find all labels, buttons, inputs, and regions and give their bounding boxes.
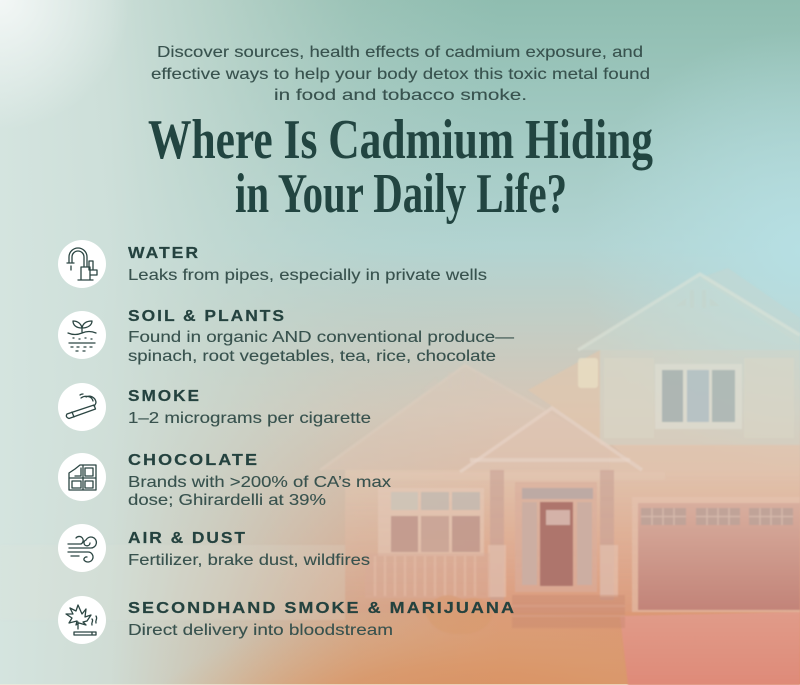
description: chocolate: Brands with >200% of CA’s max: [128, 474, 391, 491]
lower gable details: [422, 372, 510, 390]
lower left roof: [320, 365, 640, 470]
steps: [512, 595, 625, 628]
description: water: Leaks from pipes, especially in private wells: [128, 267, 487, 284]
upper rear roof: [700, 268, 800, 345]
item: air and dust: [58, 524, 370, 572]
front door: [515, 482, 597, 592]
left window: [378, 488, 484, 556]
intro text: [151, 44, 650, 104]
description: soil and plants: [128, 329, 514, 365]
icon: cigarette: [58, 383, 106, 431]
item: soil and plants: [58, 308, 514, 365]
description: secondhand smoke and marijuana: Direct delivery into bloodstream: [128, 622, 393, 639]
porch railing: [365, 553, 490, 598]
gable trim: [578, 274, 800, 350]
icon: sprout in soil: [58, 311, 106, 359]
garage: [632, 497, 800, 612]
title: in Your Daily Life?: [235, 163, 567, 225]
heading: air and dust: AIR & DUST: [128, 530, 247, 547]
description: chocolate: dose; Ghirardelli at 39%: [128, 492, 326, 509]
intro text: effective ways to help your body detox this toxic metal found: [151, 66, 650, 83]
intro text: Discover sources, health effects of cadmium exposure, and: [157, 44, 643, 61]
illustration: house: [0, 268, 800, 685]
heading: smoke: SMOKE: [128, 388, 201, 405]
item: smoke: [58, 383, 371, 431]
description: chocolate: [128, 474, 391, 509]
intro text: in food and tobacco smoke.: [274, 87, 527, 104]
shrubs: [425, 595, 493, 634]
icon: marijuana leaf and joint: [58, 596, 106, 644]
heading: water: WATER: [128, 245, 200, 262]
description: soil and plants: spinach, root vegetables, tea, rice, chocolate: [128, 348, 496, 365]
heading: soil and plants: SOIL & PLANTS: [128, 308, 286, 325]
description: smoke: 1–2 micrograms per cigarette: [128, 410, 371, 427]
item: chocolate: [58, 452, 391, 509]
tan roof: [528, 350, 640, 470]
icon: wind swirls: [58, 524, 106, 572]
lower walls: [345, 470, 800, 612]
upper window: [655, 364, 742, 429]
description: air and dust: Fertilizer, brake dust, wildfires: [128, 552, 370, 569]
driveway: [620, 612, 800, 685]
item: secondhand smoke and marijuana: [58, 596, 516, 644]
lamp: [578, 358, 598, 388]
title: [148, 109, 653, 225]
heading: secondhand smoke and marijuana: SECONDHAND SMOKE & MARIJUANA: [128, 600, 516, 617]
heading: chocolate: CHOCOLATE: [128, 452, 259, 469]
fence: [0, 545, 345, 620]
icon: chocolate bar: [58, 453, 106, 501]
upper wall: [600, 350, 800, 445]
upper gable: [578, 274, 800, 350]
title: Where Is Cadmium Hiding: [148, 109, 653, 171]
description: soil and plants: Found in organic AND conventional produce—: [128, 329, 514, 346]
porch frame: [365, 472, 665, 480]
item: water: [58, 240, 487, 288]
lower right roof: [612, 445, 800, 470]
icon: faucet: [58, 240, 106, 288]
porch gable: [460, 408, 642, 470]
